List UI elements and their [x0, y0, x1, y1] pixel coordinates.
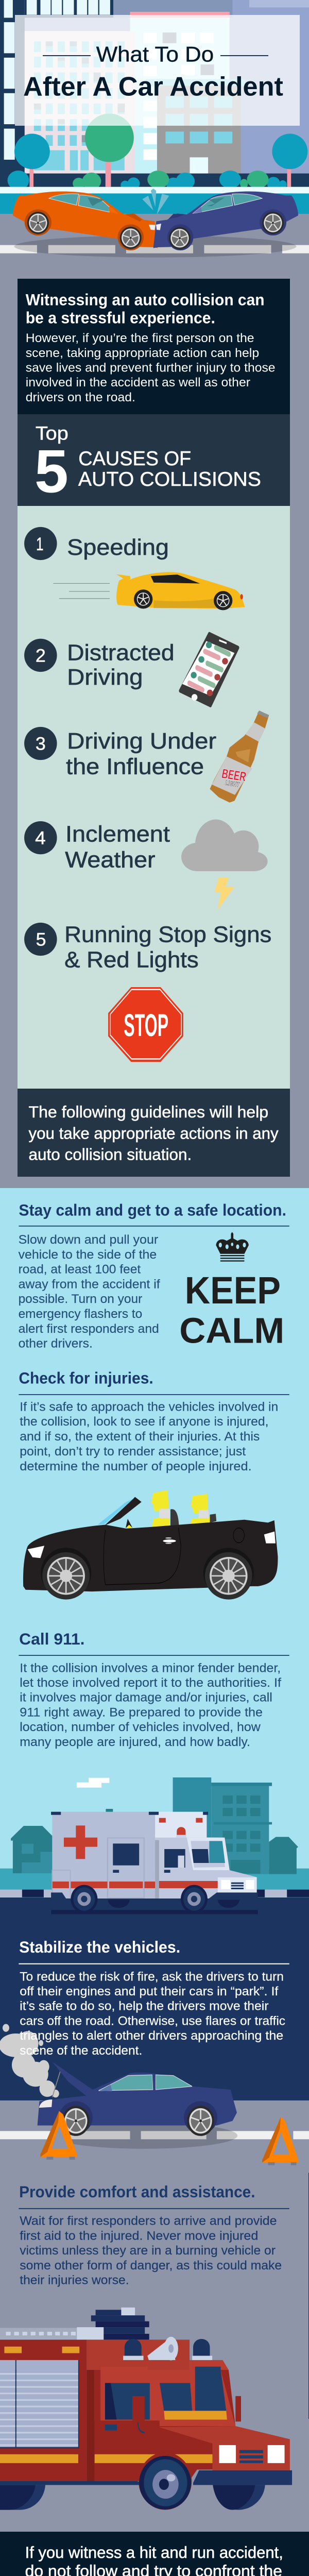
step 4 body text: scene of the accident.	[20, 2044, 142, 2058]
step 1 body text: alert first responders and	[19, 1322, 159, 1336]
street and collision scene	[0, 187, 309, 258]
fire truck lower	[0, 2370, 292, 2514]
closing hit and run text: If you witness a hit and run accident,	[25, 2544, 283, 2562]
cause 2: distracted driving	[24, 634, 238, 706]
step 4 body text: it’s safe to do so, help the drivers move their	[20, 1999, 269, 2013]
panel: five causes	[18, 506, 290, 1089]
kerb	[0, 1890, 309, 1897]
cause 1: speeding	[24, 527, 245, 610]
step 1 body text: other drivers.	[19, 1336, 93, 1351]
cause 5: running stop signs and red lights: 5	[36, 930, 46, 950]
guidelines panel	[18, 1089, 290, 1177]
closing hit and run text	[25, 2544, 291, 2576]
step 5 body text: Wait for first responders to arrive and provide	[20, 2214, 277, 2228]
step 4: stabilize the vehicles: Stabilize the vehicles.	[19, 1938, 180, 1956]
keep calm sign	[179, 1232, 284, 1351]
illustration: smoking blue car	[38, 2062, 237, 2136]
step 5 body text: their injuries worse.	[20, 2274, 129, 2287]
hedge band and bushes	[0, 160, 309, 191]
step 5: provide comfort and assistance: Provide comfort and assistance.	[19, 2182, 255, 2201]
step 2 body text: determine the number of people injured.	[20, 1460, 252, 1473]
intro body text	[26, 331, 276, 404]
title: After A Car Accident	[23, 72, 283, 101]
icon: crown	[216, 1232, 249, 1262]
guidelines panel: you take appropriate actions in any	[28, 1124, 279, 1142]
icon: smartphone	[180, 634, 238, 706]
intro body text: drivers on the road.	[26, 391, 135, 404]
illustration: convertible with crash dummies	[23, 1490, 278, 1600]
step 4 body text: off their engines and put their cars in “park”. If	[20, 1985, 279, 1998]
smoke	[0, 2024, 59, 2097]
cause 4: inclement weather: Inclement	[65, 821, 170, 846]
title	[23, 42, 283, 101]
cause 5: running stop signs and red lights: Running Stop Signs	[64, 922, 271, 947]
step 4 body text: cars off the road. Otherwise, use flares or traffic	[20, 2014, 285, 2028]
intro heading: Witnessing an auto collision can	[26, 291, 265, 309]
step 2: check for injuries	[19, 1369, 289, 1600]
intro heading	[26, 291, 265, 327]
illustration: fire truck	[0, 2308, 292, 2514]
cause 5: running stop signs and red lights: & Red Lights	[64, 946, 199, 972]
step 5 body text: first aid to the injured. Never move injured	[20, 2229, 258, 2243]
icon: warning triangle right	[262, 2117, 299, 2165]
cause 4: inclement weather: 4	[35, 828, 46, 849]
intro heading: be a stressful experience.	[26, 309, 215, 327]
cause 1: speeding: 1	[36, 535, 44, 554]
step 3 body text: many people are injured, and how badly.	[20, 1735, 250, 1749]
title overlay panel	[15, 15, 300, 126]
step 3 body text: it involves major damage and/or injuries, call	[20, 1691, 272, 1705]
step 2 body text: the collision, look to see if anyone is injured,	[20, 1415, 269, 1429]
keep calm sign: KEEP	[185, 1269, 281, 1312]
impact burst	[142, 189, 169, 215]
step 1: stay calm: Stay calm and get to a safe location.	[19, 1201, 286, 1219]
cause 3: driving under the influence: the Influence	[66, 754, 204, 779]
top 5 causes heading panel	[18, 414, 290, 506]
cause 2: distracted driving: 2	[36, 646, 46, 666]
step 3 body text	[20, 1661, 281, 1749]
roller door	[0, 2370, 79, 2448]
road under car	[0, 2100, 309, 2173]
step 2 body text: point, don’t try to render assistance; just	[20, 1445, 246, 1459]
step 2 body text: If it’s safe to approach the vehicles involved in	[20, 1400, 278, 1414]
step 3 body text: 911 right away. Be prepared to provide the	[20, 1705, 263, 1719]
keep calm sign: CALM	[179, 1310, 284, 1351]
step 1: stay calm	[19, 1201, 289, 1351]
illustration: ambulance scene	[0, 1777, 309, 1914]
top 5 causes heading panel: CAUSES OF	[78, 447, 191, 469]
icon: stop sign	[108, 987, 183, 1062]
title: What To Do	[96, 42, 214, 66]
icon: speeding yellow car	[53, 572, 245, 610]
step 3: call 911: Call 911.	[19, 1630, 85, 1648]
step 3 body text: It the collision involves a minor fender bender,	[20, 1661, 281, 1675]
step 3 body text: let those involved report it to the authorities. If	[20, 1676, 281, 1690]
blue car	[153, 191, 298, 250]
step 4 body text: triangles to alert other drivers approaching the	[20, 2029, 283, 2043]
orange car	[13, 191, 158, 250]
step 4 body text	[20, 1970, 285, 2058]
step 1 body text: emergency flashers to	[19, 1307, 142, 1321]
icon: warning triangle left	[40, 2111, 77, 2160]
intro body text: However, if you’re the first person on the	[26, 331, 254, 345]
step 1 body text: away from the accident if	[19, 1277, 160, 1291]
icon: beer bottle: BEER	[220, 766, 248, 784]
icon: beer bottle	[210, 710, 269, 803]
cause 5: running stop signs and red lights	[24, 922, 271, 1062]
top 5 causes heading panel: Top	[36, 422, 68, 444]
top 5 causes heading panel: AUTO COLLISIONS	[78, 468, 261, 490]
city buildings	[11, 1777, 298, 1874]
cause 3: driving under the influence	[24, 710, 269, 803]
cause 4: inclement weather: Weather	[65, 847, 156, 872]
ambulance	[51, 1809, 258, 1914]
heading: check for injuries: Check for injuries.	[19, 1369, 153, 1387]
cause 2: distracted driving: Driving	[67, 664, 143, 689]
intro body text: involved in the accident as well as other	[26, 376, 250, 389]
intro body text: scene, taking appropriate action can help	[26, 346, 259, 360]
step 5: provide comfort and assistance	[19, 2182, 289, 2287]
header city scene	[0, 0, 309, 191]
cause 1: speeding: Speeding	[67, 534, 169, 560]
cause 3: driving under the influence: Driving Under	[67, 728, 216, 753]
step 1 body text: possible. Turn on your	[19, 1292, 142, 1306]
icon: stop sign: STOP	[124, 1008, 168, 1043]
step 4: stabilize the vehicles	[0, 1938, 309, 2173]
fire truck upper	[0, 2308, 229, 2370]
step 1 body text: Slow down and pull your	[19, 1233, 158, 1247]
top 5 causes heading panel: 5	[35, 438, 68, 506]
guidelines panel: auto collision situation.	[28, 1145, 192, 1164]
intro body text: save lives and prevent further injury to those	[26, 361, 276, 375]
step 2 body text: and if so, the extent of their injuries. At this	[20, 1430, 260, 1444]
step 4 body text: To reduce the risk of fire, ask the drivers to turn	[20, 1970, 284, 1984]
step 3: call 911	[19, 1630, 289, 1749]
buildings	[0, 0, 309, 187]
cause 2: distracted driving: Distracted	[67, 640, 175, 665]
cause 3: driving under the influence: 3	[36, 734, 46, 754]
guidelines panel: The following guidelines will help	[28, 1103, 268, 1121]
cause 4: inclement weather	[24, 820, 268, 910]
step 5 body text: victims unless they are in a burning vehicle or	[20, 2244, 276, 2258]
intro panel	[18, 279, 290, 414]
step 5 body text	[20, 2214, 282, 2287]
step 1 body text	[19, 1233, 160, 1351]
step 1 body text: vehicle to the side of the	[19, 1248, 157, 1262]
step 2 body text	[20, 1400, 278, 1473]
trees	[14, 113, 307, 169]
icon: storm cloud	[181, 820, 268, 910]
icon: beer bottle: LIGHT	[225, 779, 240, 789]
step 1 body text: road, at least 100 feet	[19, 1262, 141, 1276]
step 5 body text: some other form of danger, as this could make	[20, 2259, 282, 2273]
step 3 body text: location, number of vehicles involved, how	[20, 1720, 261, 1734]
